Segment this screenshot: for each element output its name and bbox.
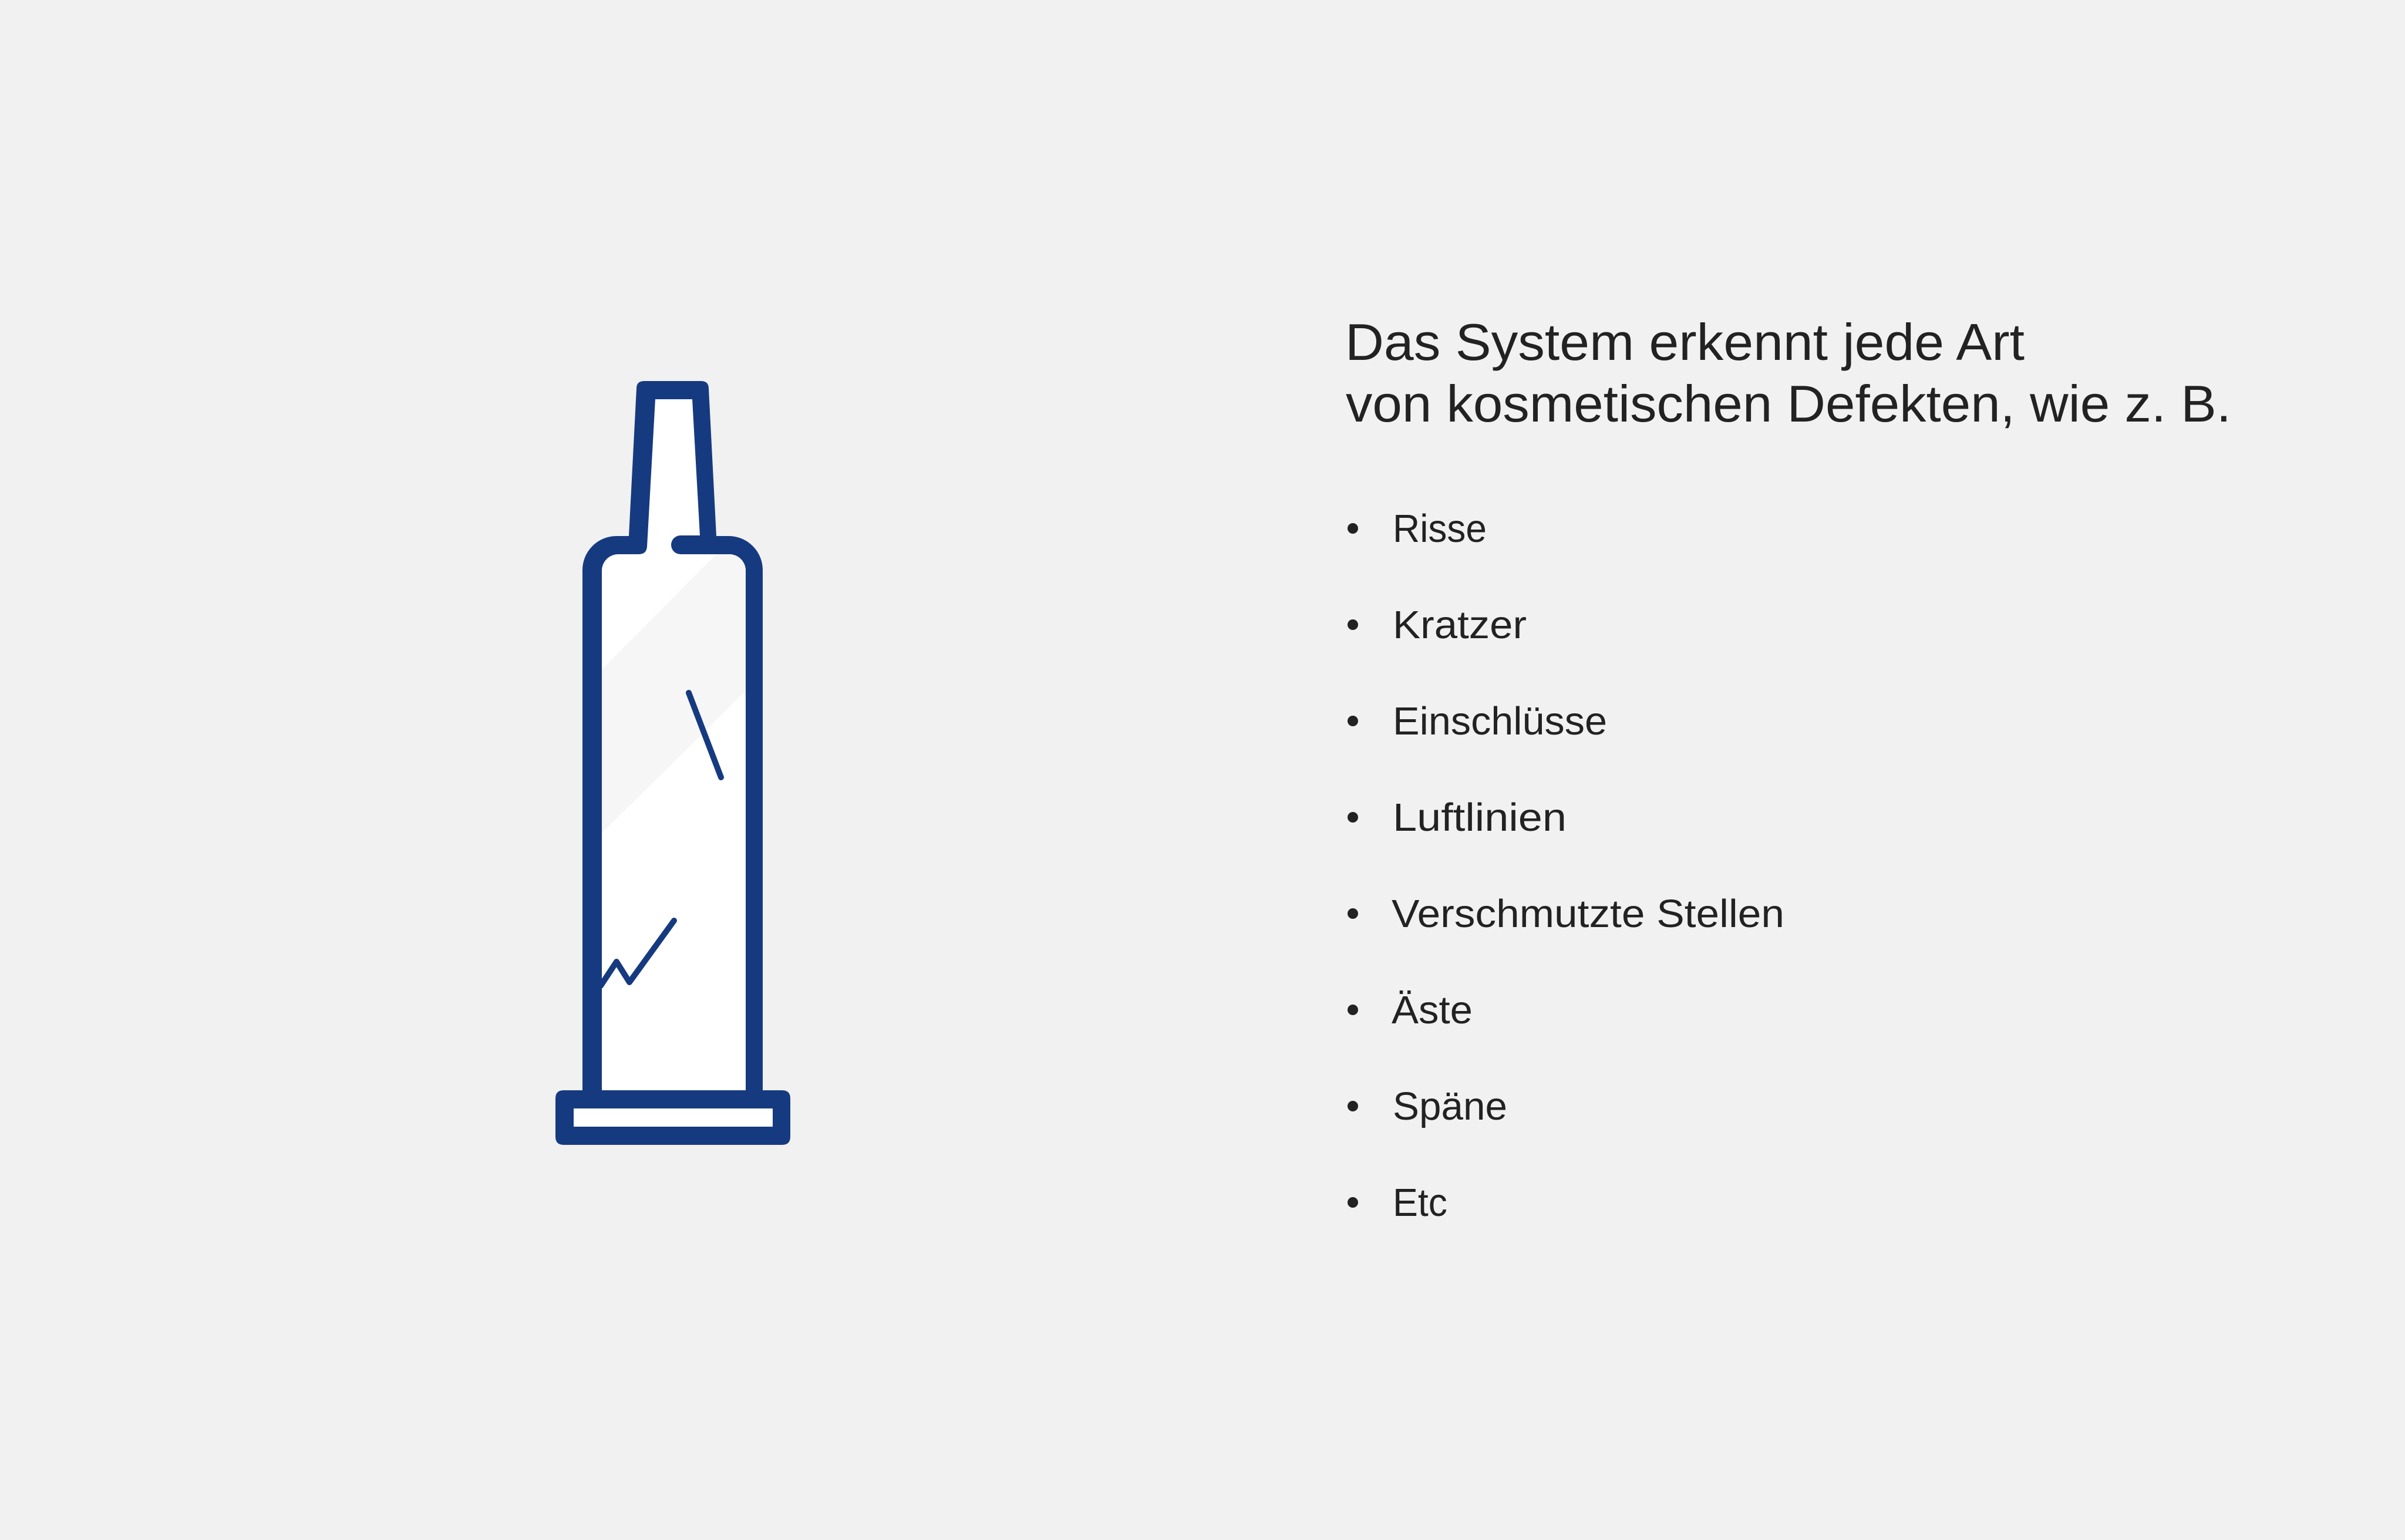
bottle outline (555, 381, 790, 1145)
icon: cracked tube bottle (555, 381, 790, 1145)
defect list (1348, 507, 1784, 1225)
heading: von kosmetischen Defekten, wie z. B. (1346, 375, 2231, 433)
defect: crack (601, 921, 674, 986)
list item: Risse: Risse (1393, 507, 1487, 551)
heading: Das System erkennt jede Art (1345, 313, 2025, 371)
defect: scratch (689, 693, 721, 777)
list item: Kratzer: Kratzer (1393, 603, 1527, 647)
bottle interior (602, 399, 746, 1090)
list item: Einschlüsse: Einschlüsse (1393, 699, 1607, 743)
list item: Etc: Etc (1393, 1181, 1447, 1225)
list item: Verschmutzte Stellen: Verschmutzte Stellen (1392, 892, 1784, 936)
list item: Luftlinien: Luftlinien (1393, 796, 1567, 840)
base slot (574, 1108, 773, 1127)
heading (1345, 313, 2231, 433)
list item: Risse (1348, 507, 1487, 551)
glass sheen (602, 554, 746, 833)
list item: Äste: Äste (1392, 988, 1473, 1032)
list item: Späne: Späne (1393, 1084, 1507, 1128)
list item: Etc (1348, 1181, 1447, 1225)
list item: Äste (1348, 988, 1473, 1032)
